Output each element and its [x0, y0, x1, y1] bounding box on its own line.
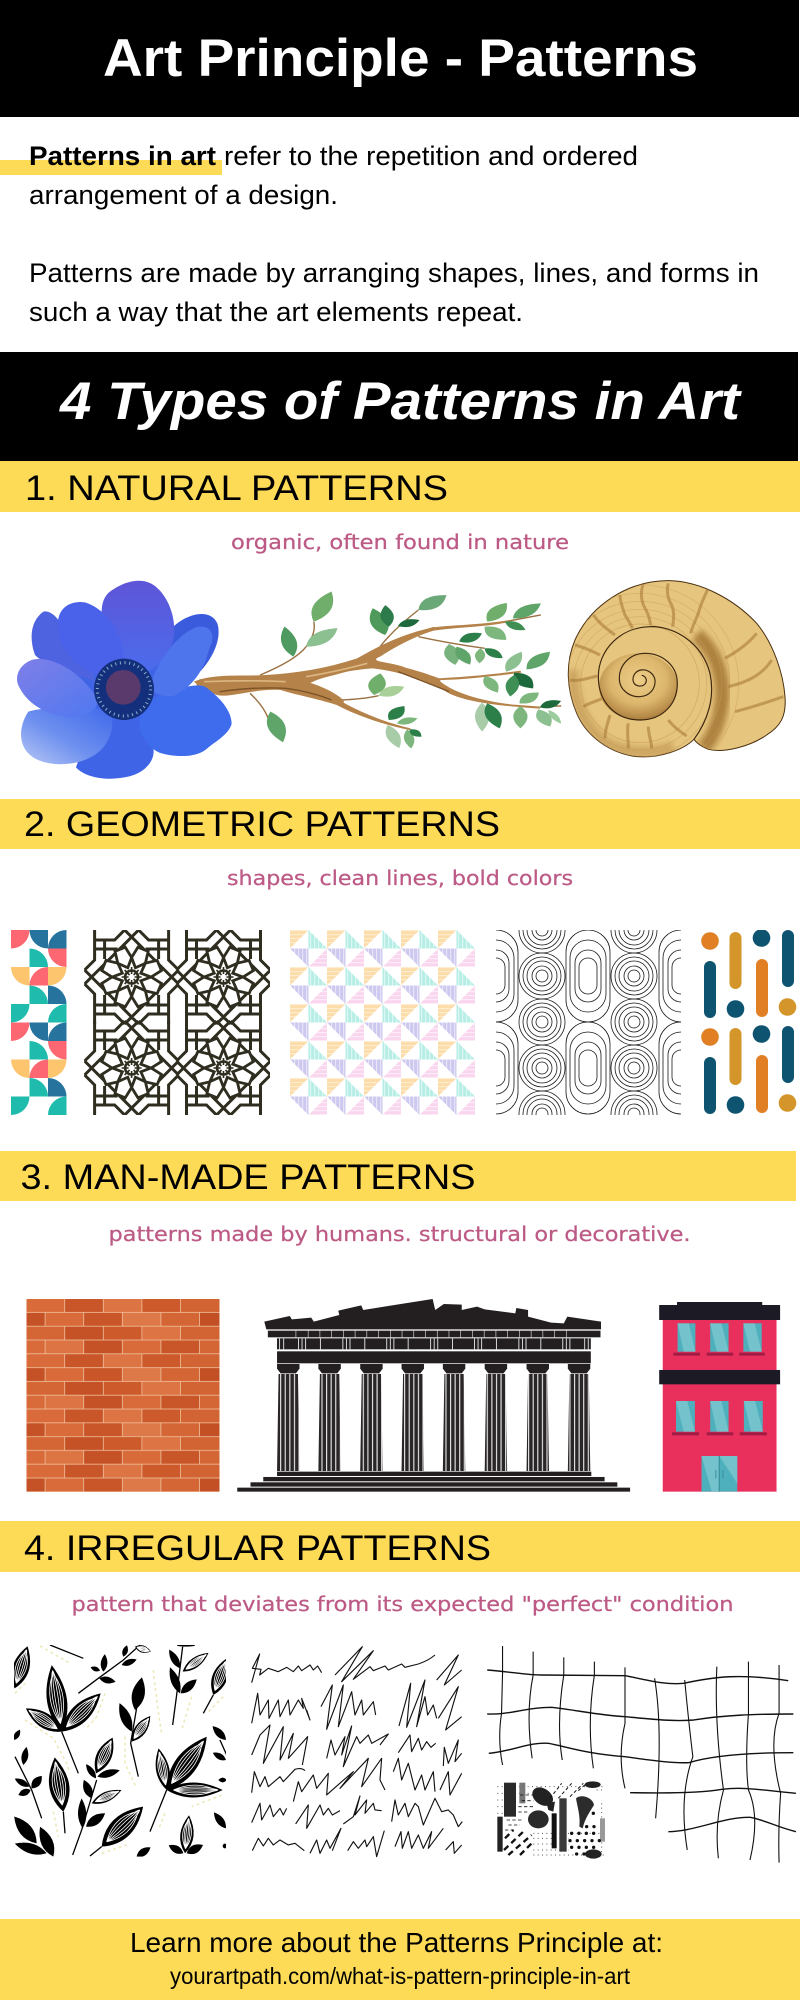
- caption: man-made: patterns made by humans. structural or decorative.: [108, 1222, 690, 1246]
- pattern: black botanical leaves: [7, 1643, 234, 1860]
- footer call to action: Learn more about the Patterns Principle at:: [130, 1927, 663, 1958]
- illustration: red building: [659, 1302, 780, 1492]
- section banner: 4 types: [0, 352, 798, 461]
- title banner: [0, 0, 799, 117]
- heading: man-made: [0, 1151, 796, 1201]
- illustration: snail shell: [568, 580, 786, 758]
- pattern: quarter circles: [11, 930, 66, 1115]
- illustration: blue flower: [17, 581, 232, 779]
- heading: irregular: [0, 1521, 800, 1572]
- pattern: pastel triangles: [290, 930, 475, 1115]
- heading: man-made: 3. MAN-MADE PATTERNS: [20, 1158, 475, 1197]
- illustration: greek temple: [237, 1299, 630, 1492]
- section banner: 4 types: 4 Types of Patterns in Art: [59, 372, 742, 431]
- intro text block: such a way that the art elements repeat.: [29, 297, 523, 327]
- title banner: Art Principle - Patterns: [103, 29, 698, 88]
- panel: man-made patterns: [0, 1151, 796, 1492]
- intro text block: Patterns in art: [29, 141, 216, 171]
- pattern: wavy grid: [487, 1646, 796, 1863]
- illustration: branch with leaves: [194, 589, 564, 749]
- footer call to action: [0, 1919, 800, 2000]
- heading: irregular: 4. IRREGULAR PATTERNS: [24, 1529, 491, 1568]
- intro text block: [0, 141, 759, 327]
- panel: irregular patterns: [0, 1521, 800, 1863]
- heading: natural: 1. NATURAL PATTERNS: [25, 469, 448, 508]
- intro text block: Patterns are made by arranging shapes, lines, and forms in: [29, 258, 759, 288]
- pattern: islamic lattice: [85, 930, 270, 1115]
- caption: natural: organic, often found in nature: [231, 530, 569, 554]
- footer call to action: yourartpath.com/what-is-pattern-principle-in-art: [170, 1963, 631, 1989]
- illustration: brick wall: [26, 1299, 220, 1492]
- heading: geometric: 2. GEOMETRIC PATTERNS: [24, 805, 500, 844]
- panel: geometric patterns: [0, 799, 800, 1137]
- pattern: concentric ovals: [496, 930, 681, 1115]
- heading: natural: [0, 461, 800, 512]
- heading: geometric: [0, 799, 800, 849]
- intro text block: arrangement of a design.: [29, 180, 338, 210]
- caption: irregular: pattern that deviates from its expected "perfect" condition: [72, 1592, 734, 1616]
- intro text block: refer to the repetition and ordered: [224, 141, 638, 171]
- caption: geometric: shapes, clean lines, bold colors: [227, 866, 573, 890]
- panel: natural patterns: [0, 461, 800, 782]
- pattern: scribbles: [252, 1647, 462, 1857]
- pattern: pills and dots: [701, 929, 796, 1114]
- pattern: ink texture swatch: [497, 1781, 605, 1859]
